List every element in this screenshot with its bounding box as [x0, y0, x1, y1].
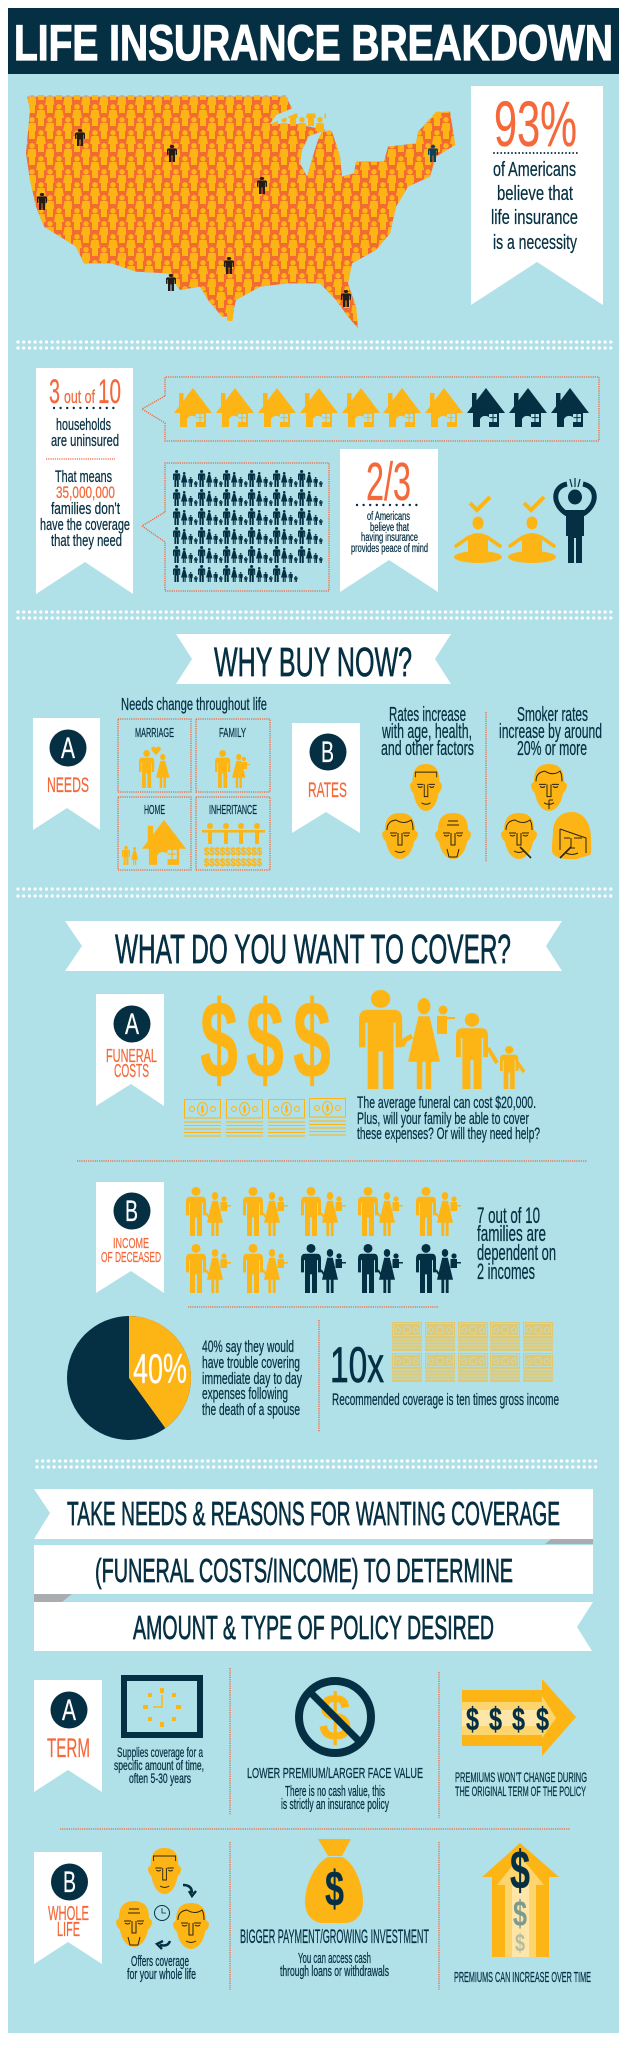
text: rates increase: and other factors [381, 738, 474, 760]
callout: 3 out of 10 ribbon: 35,000,000 [56, 484, 115, 502]
text: supplies coverage [114, 1744, 204, 1786]
icon: no dollar sign [299, 1680, 371, 1754]
ribbon: B income of deceased: INCOME [113, 1235, 149, 1252]
callout: 93% ribbon: 93% [494, 88, 577, 160]
callout: 3 out of 10 ribbon: have the coverage [40, 516, 130, 534]
text: 10x: 10x [330, 1337, 384, 1393]
text: smoker rates [499, 704, 602, 760]
icon: faces by age [382, 764, 471, 859]
panel: inheritance: $$$$$$$$$$$ [204, 857, 262, 869]
heading: why buy now [176, 634, 451, 685]
text: lower premium [247, 1765, 423, 1813]
text: average funeral [357, 1093, 540, 1143]
text: lower premium: is strictly an insurance policy [281, 1797, 389, 1813]
callout: 2/3 ribbon: provides peace of mind [351, 543, 428, 555]
text: 40% say: have trouble covering [202, 1353, 300, 1372]
ribbon: A funeral costs: A [125, 1008, 139, 1041]
panel: home [118, 797, 191, 870]
icon: cash stacks [184, 1098, 346, 1136]
text: needs change: Needs change throughout life [121, 694, 267, 714]
callout: 3 out of 10 ribbon: 10 [98, 373, 121, 411]
icon: dollars arrow [462, 1679, 576, 1756]
icon: three big dollars [200, 979, 331, 1102]
callout: 3 out of 10 ribbon [36, 368, 133, 594]
icon: three big dollars: $ [200, 979, 238, 1102]
ribbon: B whole life: WHOLE [48, 1903, 89, 1925]
callout: 2/3 ribbon: believe that [370, 522, 410, 534]
text: 40% say: expenses following [202, 1384, 288, 1403]
text: 40% say: 40% say they would [202, 1337, 294, 1356]
panel: home: HOME [144, 802, 165, 817]
text: 40% say: immediate day to day [202, 1369, 302, 1388]
icon: up arrow dollars: $ [515, 1929, 525, 1957]
ribbon: A needs: A [61, 732, 75, 765]
icon: smoker faces [501, 764, 591, 859]
map: USA of people [26, 95, 455, 328]
icon: dollars arrow: $ [466, 1701, 479, 1737]
panel: inheritance [196, 797, 270, 870]
ribbon: B income of deceased: OF DECEASED [101, 1249, 161, 1266]
ribbon: A term: TERM [47, 1733, 90, 1763]
text: bigger payment: through loans or withdrawals [280, 1964, 389, 1980]
ribbon: B rates [292, 723, 360, 833]
icon: three big dollars: $ [293, 979, 331, 1102]
panel: family: FAMILY [219, 725, 246, 740]
text: 40% say: the death of a spouse [202, 1400, 300, 1419]
icon: no dollar sign: $ [319, 1680, 351, 1754]
text: offers coverage: for your whole life [127, 1967, 196, 1983]
ribbon: B rates: RATES [308, 779, 347, 802]
icon: three big dollars: $ [246, 979, 284, 1102]
icon: clock frame [124, 1678, 200, 1735]
panel: inheritance: $$$$$$$$$$$ [204, 846, 262, 858]
ribbon: B whole life [34, 1852, 102, 1964]
chart: 40% pie [67, 1316, 191, 1440]
callout: 2/3 ribbon: of Americans [367, 511, 410, 523]
text: bigger payment [240, 1927, 429, 1980]
icon: up arrow dollars [482, 1839, 559, 1957]
ribbon: A needs: NEEDS [47, 774, 89, 797]
ribbon: A needs [33, 718, 100, 830]
ribbon: A funeral costs: FUNERAL [106, 1046, 157, 1066]
icon: dollars arrow: $ [512, 1701, 525, 1737]
icon: up arrow dollars: $ [513, 1893, 527, 1934]
text: premiums won't change [455, 1769, 587, 1799]
text: 40% say [202, 1337, 302, 1419]
text: 7 out of 10: dependent on [477, 1240, 556, 1265]
icon: faces cycle [116, 1848, 209, 1949]
families grid: 35 million [142, 463, 329, 591]
panel: marriage [118, 719, 191, 792]
text: offers coverage: Offers coverage [131, 1954, 189, 1970]
ribbon: A term: A [62, 1694, 76, 1727]
text: rates increase [381, 704, 474, 760]
callout: 93% ribbon: believe that [497, 183, 573, 205]
heading: three-part banner [34, 1489, 593, 1651]
text: rates increase: with age, health, [381, 721, 472, 743]
panel: marriage: MARRIAGE [135, 725, 174, 740]
panel: inheritance: INHERITANCE [209, 802, 257, 817]
icon: dollars arrow: $ [536, 1701, 549, 1737]
ribbon: B income of deceased: B [125, 1195, 138, 1228]
callout: 3 out of 10 ribbon: families don't [51, 500, 120, 518]
callout: 2/3 ribbon [340, 449, 438, 592]
text: supplies coverage: Supplies coverage for a [117, 1744, 203, 1760]
text: 7 out of 10: 7 out of 10 [477, 1203, 540, 1228]
callout: 2/3 ribbon: having insurance [361, 532, 418, 544]
text: supplies coverage: often 5-30 years [129, 1770, 191, 1786]
callout: 3 out of 10 ribbon: out of [64, 387, 96, 407]
text: bigger payment: You can access cash [298, 1951, 371, 1967]
text: BIGGER PAYMENT/GROWING INVESTMENT [240, 1927, 429, 1948]
text: rates increase: Rates increase [389, 704, 466, 726]
icon: up arrow dollars: $ [510, 1839, 530, 1901]
panel: family [196, 719, 270, 792]
ribbon: B income of deceased [96, 1182, 164, 1293]
icon: stressed person [556, 478, 594, 563]
icon: calm meditators [454, 497, 556, 563]
ribbon: A funeral costs: COSTS [114, 1061, 149, 1081]
text: offers coverage [127, 1954, 196, 1983]
ribbon: B whole life: B [63, 1866, 76, 1899]
ribbon: B rates: B [321, 736, 334, 769]
icon: dollars arrow: $ [489, 1701, 502, 1737]
callout: 3 out of 10 ribbon: 3 [49, 373, 60, 411]
ribbon: A term [34, 1680, 102, 1792]
text: lower premium: LOWER PREMIUM/LARGER FACE VALUE [247, 1765, 423, 1782]
heading: why buy now: WHY BUY NOW? [214, 639, 412, 685]
callout: 93% ribbon: life insurance [491, 207, 578, 229]
callout: 93% ribbon: is a necessity [493, 232, 577, 254]
text: lower premium: There is no cash value, this [285, 1784, 385, 1800]
text: 7 out of 10 [477, 1203, 556, 1284]
chart: 40% pie: 40% [133, 1345, 187, 1392]
text: supplies coverage: specific amount of time, [114, 1757, 204, 1773]
callout: 2/3 ribbon: 2/3 [366, 452, 411, 512]
icon: money bag [305, 1839, 363, 1923]
icon: big family [359, 990, 524, 1089]
callout: 3 out of 10 ribbon: households [56, 416, 111, 434]
text: 7 out of 10: families are [477, 1221, 546, 1246]
ribbon: B whole life: LIFE [57, 1919, 80, 1941]
text: 7 out of 10: 2 incomes [477, 1259, 535, 1284]
houses: 7 of 10 insured [142, 377, 599, 441]
callout: 3 out of 10 ribbon: are uninsured [51, 432, 119, 450]
callout: 93% ribbon: of Americans [493, 159, 576, 181]
callout: 93% ribbon [471, 86, 603, 305]
icon: money bag: $ [325, 1861, 344, 1917]
callout: 3 out of 10 ribbon: that they need [51, 532, 122, 550]
chart: 7 of 10 families [186, 1187, 461, 1293]
icon: ten bills grid [392, 1322, 553, 1382]
callout: 3 out of 10 ribbon: That means [55, 468, 112, 486]
ribbon: A funeral costs [96, 994, 164, 1106]
